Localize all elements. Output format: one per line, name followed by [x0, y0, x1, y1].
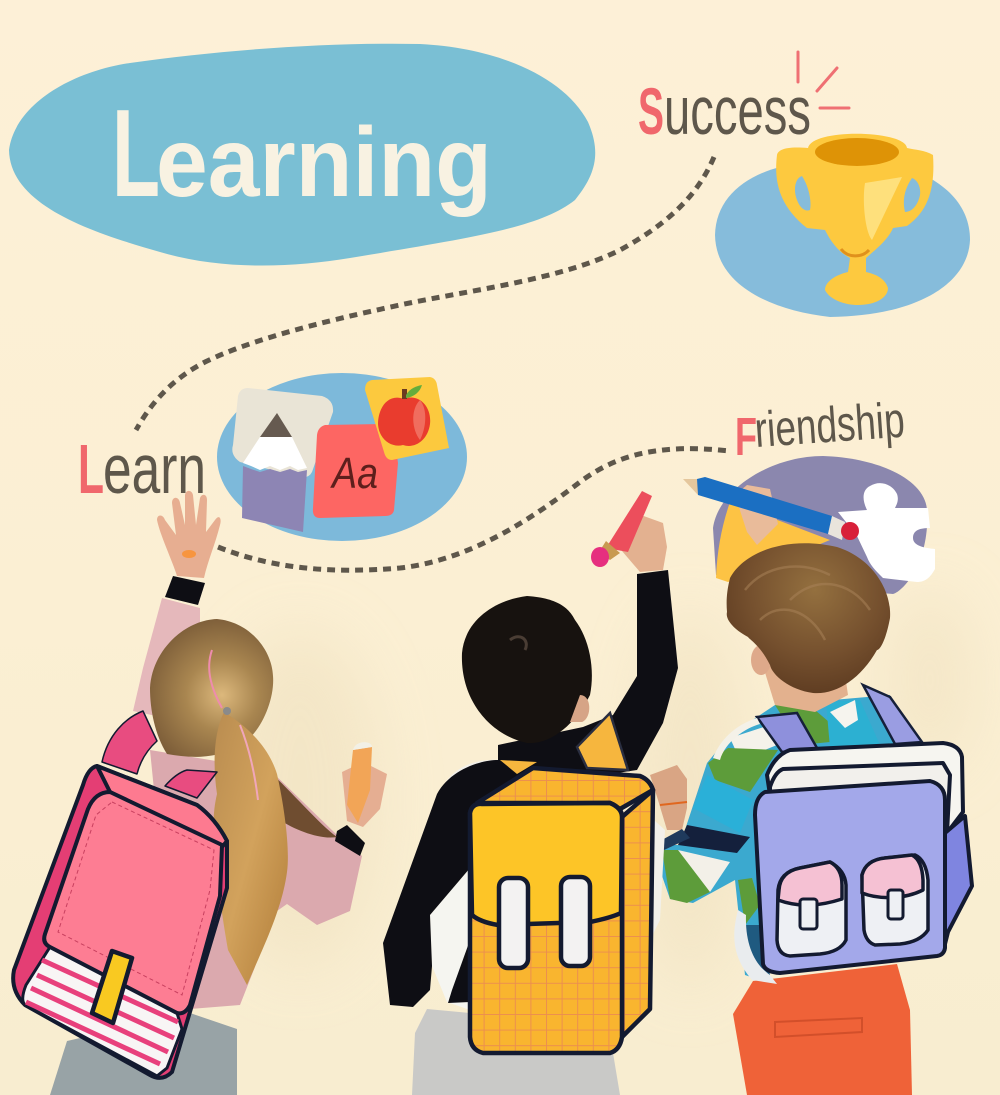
icon: Aa card: [313, 424, 398, 518]
torso sleeve: [150, 750, 362, 1009]
title text: L: [112, 85, 160, 223]
icon: Aa card: Aa: [329, 449, 378, 498]
label: Friendship: [735, 392, 906, 467]
title text: earning: [156, 107, 492, 217]
black sweater and arms: [383, 570, 678, 1007]
yellow tab: [92, 951, 132, 1023]
trousers: [50, 1013, 237, 1095]
boy 2 figure: [383, 491, 678, 1095]
dashed path: learn to success: [136, 157, 714, 430]
blue pencil: [683, 477, 859, 540]
raised hand: [735, 485, 778, 545]
label: Learn: L: [78, 430, 104, 508]
trousers: [733, 964, 912, 1095]
pink backpack flap: [44, 792, 222, 1013]
crayon: [591, 491, 652, 567]
boy 3 figure: [650, 477, 972, 1095]
icon group: friendship oval with yellow piece and puzzle: [713, 456, 935, 594]
dashed path: learn to friendship: [218, 449, 730, 570]
icon: pencil: [232, 388, 333, 532]
label: Success: [638, 73, 811, 149]
raised sleeve: [133, 598, 200, 720]
label: Success: uccess: [664, 73, 811, 149]
backpack: yellow: [470, 768, 653, 1053]
girl figure: [13, 491, 387, 1095]
neck and ear: [755, 640, 848, 712]
right hand and marker: [335, 742, 387, 856]
label: Friendship: riendship: [753, 392, 906, 458]
raised hand: [622, 511, 667, 572]
hand: [157, 491, 221, 578]
striped sweater: [660, 695, 895, 980]
title badge: Learning: [9, 44, 595, 266]
label: Success: S: [638, 74, 664, 148]
icon: apple card: [365, 377, 449, 460]
backpack straps white edge: [713, 718, 760, 760]
title text: [112, 85, 492, 223]
white inner strap: [430, 868, 470, 1010]
hair and ponytail: [150, 619, 288, 985]
trousers: [412, 1009, 620, 1095]
stripes on pink backpack: [26, 960, 178, 1064]
icon: puzzle piece: [838, 483, 935, 582]
black cuff: [165, 576, 205, 605]
wall shadows behind children: [220, 590, 970, 990]
icon: trophy on blue oval: [715, 134, 970, 317]
backpack straps: [757, 685, 922, 752]
hair streak toward arm: [270, 772, 337, 838]
yellow strap: [577, 713, 628, 770]
head: [462, 596, 592, 743]
label: Learn: [78, 430, 206, 508]
icon group: learn stationery on blue oval: [217, 373, 467, 541]
left hand and wristband: [650, 765, 690, 850]
backpack: purple: [755, 743, 972, 973]
backpack: pink: [13, 711, 227, 1078]
label: Learn: earn: [103, 430, 206, 508]
icon: sparkle lines: [798, 52, 849, 108]
label: Friendship: F: [735, 407, 757, 467]
head hair: [727, 543, 890, 693]
